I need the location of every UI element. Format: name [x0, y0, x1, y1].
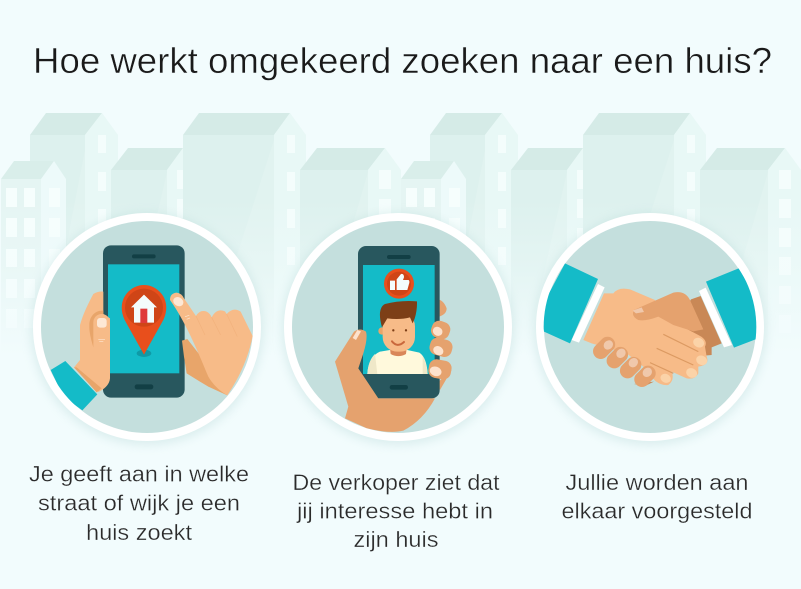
text: step 3 caption: [562, 470, 752, 524]
text: step 2 caption: [292, 470, 500, 552]
illustration: handshake: [540, 263, 760, 390]
background: city skyline: [0, 113, 801, 357]
icon: holding hand: [335, 319, 454, 432]
text: step 1 caption: Je geeft aan in welke: [29, 462, 249, 486]
icon: left hand: [51, 292, 110, 410]
text: step 2 caption: De verkoper ziet dat: [292, 470, 500, 495]
icon: thumbs up badge: [384, 269, 414, 299]
circle badge 2: [288, 217, 508, 437]
icon: right arm: [688, 296, 722, 356]
circle badge 1: [37, 217, 257, 437]
icon: person portrait: [367, 301, 428, 374]
circle badge 3: [540, 217, 760, 437]
icon: right hand: [170, 293, 253, 395]
icon: right hand thumb: [633, 292, 703, 331]
text: step 2 caption: zijn huis: [354, 527, 438, 552]
icon: fingers behind phone: [440, 300, 452, 390]
icon: phone: [103, 245, 185, 398]
icon: wrapping fingers: [593, 336, 656, 387]
icon: right sleeve: [699, 268, 760, 348]
panel: step 1 locate street: [31, 213, 263, 445]
text: step 2 caption: jij interesse hebt in: [296, 498, 493, 524]
icon: left hand: [583, 289, 709, 385]
icon: phone: [358, 246, 440, 398]
illustration: hands holding phone with map pin: [51, 245, 253, 410]
text: step 1 caption: huis zoekt: [86, 520, 192, 545]
panel: step 2 seller sees interest: [282, 213, 514, 445]
illustration: hand holding phone with person: [335, 246, 454, 432]
icon: map pin with house: [122, 285, 166, 357]
title: Hoe werkt omgekeerd zoeken naar een huis?: [33, 40, 772, 81]
text: step 1 caption: straat of wijk je een: [38, 490, 240, 516]
panel: step 3 handshake: [534, 213, 766, 445]
icon: left sleeve: [540, 263, 605, 343]
text: step 3 caption: elkaar voorgesteld: [562, 498, 752, 524]
text: step 1 caption: [29, 462, 249, 545]
text: step 3 caption: Jullie worden aan: [566, 470, 748, 495]
